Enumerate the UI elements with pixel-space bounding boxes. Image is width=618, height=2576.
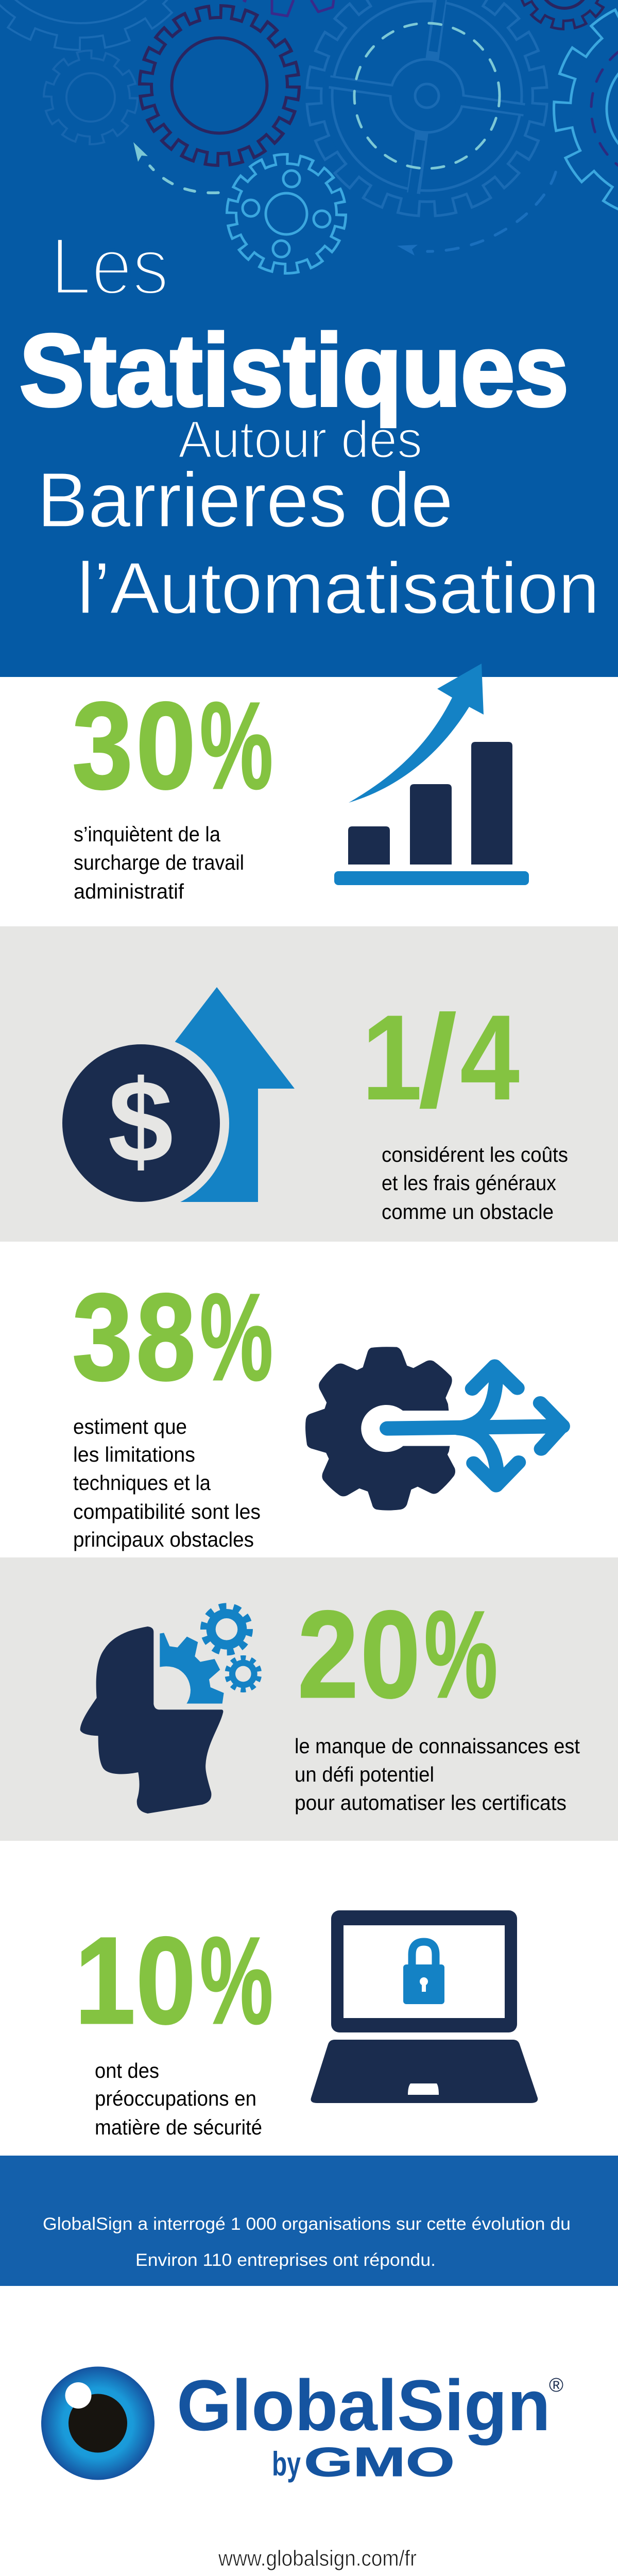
title line: Autour des: Autour des bbox=[178, 410, 422, 469]
stat: 1/4: 1 bbox=[362, 990, 422, 1126]
gear: faint large centre with spokes bbox=[315, 0, 539, 208]
text block: 30% description: surcharge de travail bbox=[74, 851, 244, 874]
logo by: by bbox=[272, 2445, 301, 2483]
stat: 30%: 3 bbox=[72, 676, 133, 815]
panel: header background bbox=[0, 0, 618, 677]
text block: 38% description: estiment que bbox=[73, 1415, 187, 1438]
icon: growth bar chart bbox=[334, 664, 529, 885]
text block: 10% description: matière de sécurité bbox=[95, 2115, 262, 2139]
stat: 30%: 0 bbox=[136, 676, 196, 815]
text block: survey note bbox=[43, 2214, 571, 2270]
text block: 30% description bbox=[74, 822, 244, 903]
arrow: faint dashed bbox=[397, 172, 556, 256]
text block: 20% description bbox=[295, 1734, 580, 1815]
stat: 20% bbox=[298, 1585, 497, 1723]
registered mark: ® bbox=[549, 2375, 563, 2396]
title line: Statistiques: Statistiques bbox=[20, 313, 569, 427]
arrow: teal dashed bbox=[133, 142, 218, 193]
stat: 20%: 2 bbox=[298, 1585, 358, 1723]
gear: navy top right bbox=[523, 0, 606, 25]
stat: 38%: % bbox=[200, 1268, 273, 1406]
icon: laptop with padlock bbox=[311, 1910, 538, 2103]
logo wordmark: GlobalSign bbox=[177, 2365, 551, 2446]
logo eye bbox=[41, 2367, 154, 2480]
gear fragments: purple top bbox=[243, 0, 334, 16]
text block: 1/4 description: considérent les coûts bbox=[382, 1143, 568, 1166]
stat: 1/4: / bbox=[418, 988, 457, 1134]
panel: 1/4 bbox=[0, 926, 618, 1242]
header illustration: gears bbox=[0, 0, 618, 268]
panel: survey note band bbox=[0, 2156, 618, 2286]
stat: 30%: % bbox=[200, 676, 273, 815]
stat: 38%: 8 bbox=[136, 1268, 196, 1406]
stat: 1/4: 4 bbox=[460, 990, 520, 1126]
title line: Barrieres de: Barrieres de bbox=[37, 456, 453, 543]
title bbox=[20, 221, 599, 629]
icon: head with gears bbox=[80, 1606, 259, 1814]
title line: Les: Les bbox=[50, 221, 169, 312]
text block: 30% description: s’inquiètent de la bbox=[74, 822, 220, 846]
text block: 20% description: un défi potentiel bbox=[295, 1762, 434, 1786]
stat: 38% bbox=[72, 1268, 273, 1406]
logo GMO: GMO bbox=[304, 2439, 455, 2485]
gear: light blue far right bbox=[562, 7, 618, 210]
stat: 38%: 3 bbox=[72, 1268, 133, 1406]
text block: 10% description: ont des bbox=[95, 2059, 159, 2082]
icon: dollar with arrow: $ bbox=[108, 1056, 173, 1187]
text block: 30% description: administratif bbox=[74, 879, 184, 903]
logo: GlobalSign by GMO bbox=[41, 2365, 563, 2485]
text block: survey note: GlobalSign a interrogé 1 000 organisations sur cette évolution du bbox=[43, 2214, 571, 2234]
small gear 2 bbox=[228, 1658, 259, 1690]
text block: 1/4 description bbox=[382, 1143, 568, 1224]
panel: 20% bbox=[0, 1557, 618, 1841]
text block: 38% description: principaux obstacles bbox=[73, 1528, 254, 1551]
text block: 1/4 description: et les frais généraux bbox=[382, 1171, 556, 1195]
gear: navy bbox=[145, 11, 294, 160]
text block: 20% description: le manque de connaissances est bbox=[295, 1734, 580, 1758]
icon: dollar with arrow bbox=[53, 987, 295, 1211]
icon: gear with branching arrows bbox=[305, 1347, 562, 1511]
small gear 1 bbox=[204, 1606, 249, 1652]
stat: 10%: % bbox=[200, 1911, 273, 2049]
panel: 38% bbox=[0, 1242, 618, 1557]
stat: 20%: 0 bbox=[360, 1585, 420, 1723]
website url: www.globalsign.com/fr bbox=[218, 2546, 417, 2571]
stat: 10%: 1 bbox=[75, 1911, 135, 2049]
text block: 20% description: pour automatiser les certificats bbox=[295, 1791, 566, 1815]
text block: 1/4 description: comme un obstacle bbox=[382, 1200, 554, 1224]
text block: 10% description: préoccupations en bbox=[95, 2087, 256, 2110]
text block: 10% description bbox=[95, 2059, 262, 2139]
gear: faint top left bbox=[0, 0, 204, 43]
stat: 1/4 bbox=[362, 988, 520, 1134]
stat: 10% bbox=[75, 1911, 273, 2049]
title line: l’Automatisation: l’Automatisation bbox=[77, 547, 599, 629]
stat: 20%: % bbox=[424, 1585, 497, 1723]
stat: 10%: 0 bbox=[136, 1911, 196, 2049]
gear: faint small left bbox=[48, 55, 133, 140]
text block: survey note: Environ 110 entreprises ont répondu. bbox=[135, 2250, 436, 2270]
text block: 38% description bbox=[73, 1415, 261, 1551]
gear: light blue with holes bbox=[232, 160, 341, 268]
text block: 38% description: compatibilité sont les bbox=[73, 1500, 261, 1523]
text block: 38% description: les limitations bbox=[73, 1443, 195, 1466]
stat: 30% bbox=[72, 676, 273, 815]
text block: 38% description: techniques et la bbox=[73, 1471, 211, 1495]
panel: 10% bbox=[0, 1841, 618, 2156]
padlock bbox=[403, 1942, 444, 2004]
panel: 30% bbox=[0, 664, 618, 926]
